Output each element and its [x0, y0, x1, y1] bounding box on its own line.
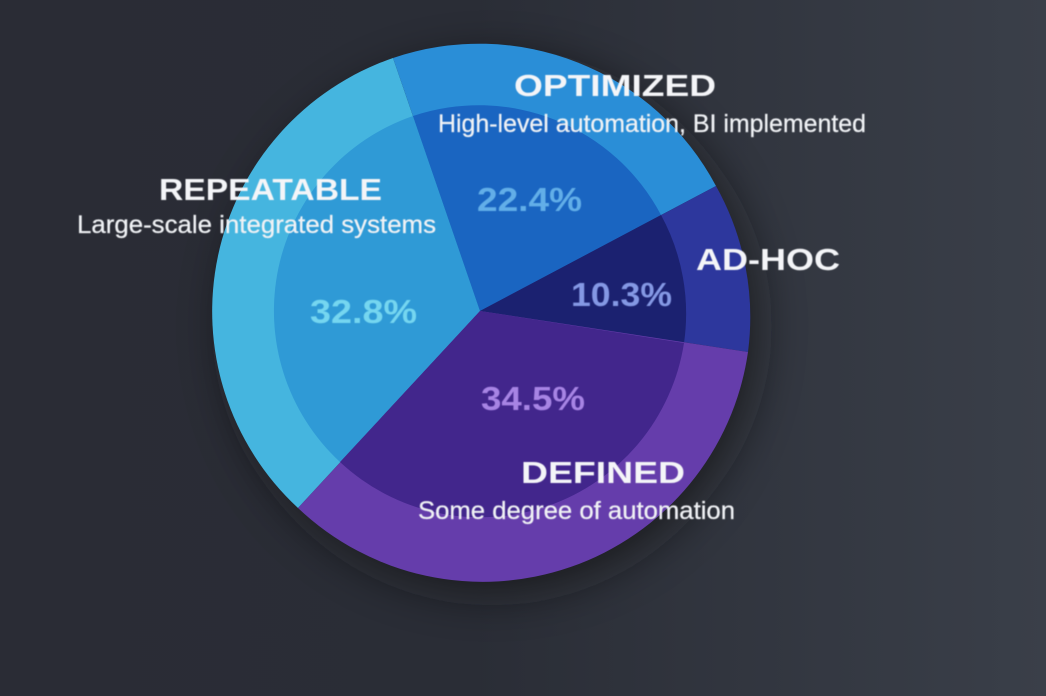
value: 22.4%: 22.4% — [477, 181, 582, 218]
label: repeatable: Large-scale integrated systems — [77, 211, 436, 239]
value: 32.8%: 32.8% — [310, 293, 417, 330]
value: 10.3%: 10.3% — [571, 276, 672, 313]
label: repeatable: REPEATABLE — [159, 172, 382, 207]
label: optimized: OPTIMIZED — [514, 68, 716, 103]
value: 34.5%: 34.5% — [481, 380, 585, 417]
labels — [77, 68, 866, 525]
label: optimized: High-level automation, BI implemented — [438, 110, 866, 138]
label: defined: Some degree of automation — [418, 497, 735, 525]
label: defined — [418, 455, 735, 525]
sector: repeatable — [212, 58, 480, 508]
pie shadow — [228, 62, 756, 590]
sector: optimized — [393, 44, 716, 311]
pie chart — [212, 44, 750, 582]
label: repeatable — [77, 172, 436, 239]
sector: ad-hoc — [480, 186, 750, 352]
label: defined: DEFINED — [521, 455, 685, 490]
label: ad-hoc: AD-HOC — [696, 242, 840, 277]
label: optimized — [438, 68, 866, 138]
sector: defined — [298, 311, 748, 582]
